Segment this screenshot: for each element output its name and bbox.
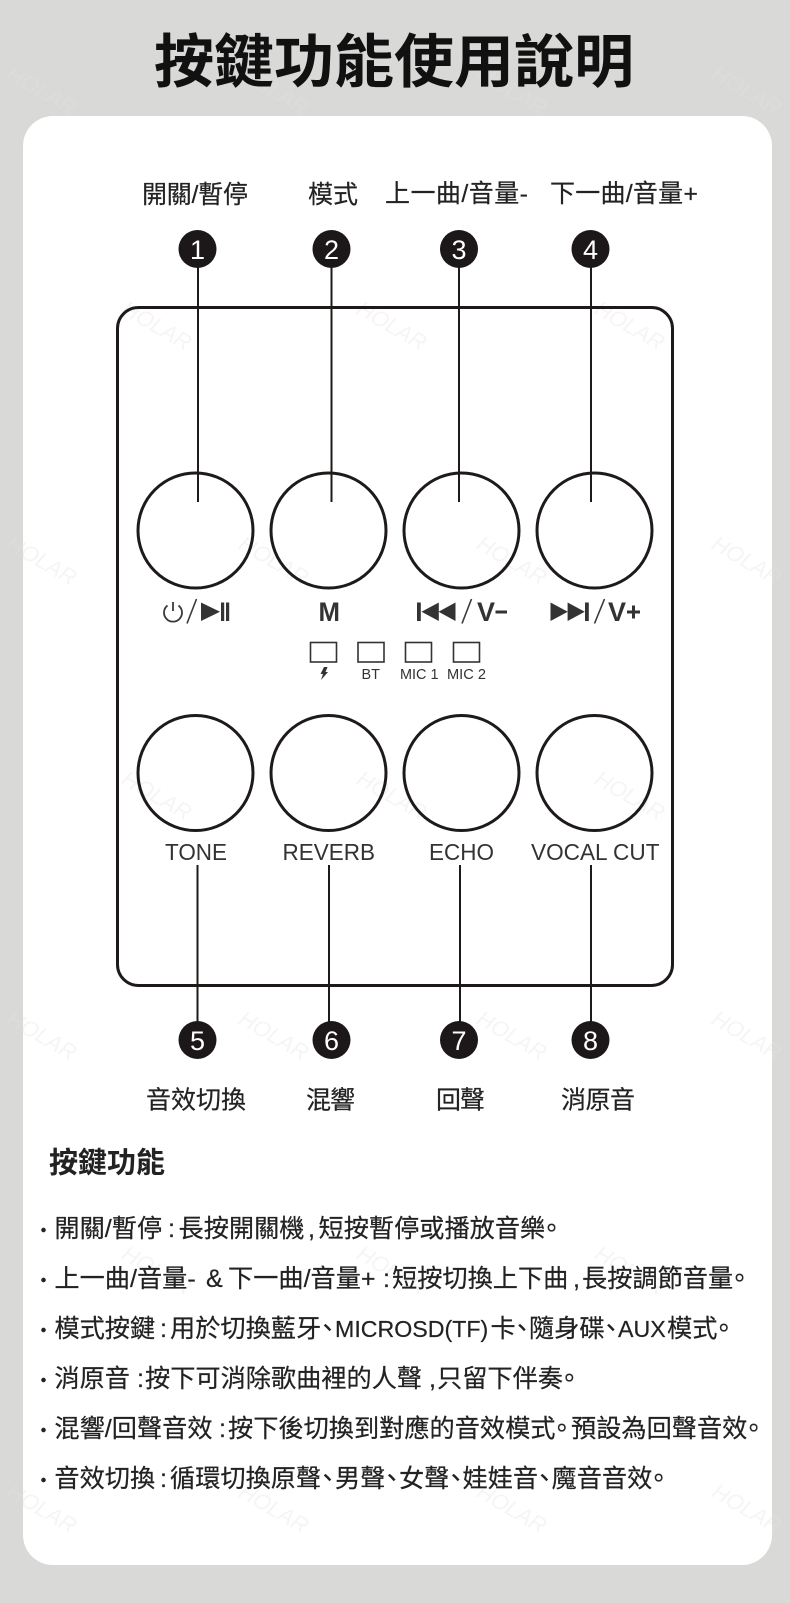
- bullet: reverb and echo: 預設為回聲音效。: [571, 1415, 760, 1443]
- top function labels: 開關/暫停: [142, 181, 248, 209]
- bullet: mode key: :: [160, 1315, 167, 1343]
- number badge 4: [572, 230, 610, 268]
- infographic: HOLAR: [473, 1479, 551, 1538]
- bullet: power and pause: :: [168, 1215, 175, 1243]
- bullet: vocal cut: 只留下伴奏。: [437, 1365, 576, 1393]
- knob labels: ECHO: [429, 839, 494, 865]
- bullet: mode key: 卡、: [490, 1315, 528, 1343]
- infographic: HOLAR: [118, 766, 196, 825]
- bullet: vocal cut: 消原音: [54, 1365, 130, 1393]
- infographic: HOLAR: [235, 61, 313, 120]
- infographic: HOLAR: [118, 296, 196, 355]
- bullet: vocal cut: [41, 1365, 576, 1393]
- bottom function labels: 音效切換: [146, 1086, 246, 1114]
- bullet: power and pause: 開關/暫停: [54, 1215, 162, 1243]
- bullet: previous and next: 下一曲/音量+: [228, 1265, 376, 1293]
- title: 按鍵功能使用說明: [154, 30, 634, 95]
- bullet: reverb and echo: 按下後切換到對應的音效模式。: [228, 1415, 568, 1443]
- infographic: HOLAR: [235, 1479, 313, 1538]
- bullet: previous and next: ,: [573, 1265, 580, 1293]
- bottom row knobs: [138, 716, 652, 830]
- bottom function labels: 消原音: [561, 1086, 635, 1114]
- bullet: previous and next: [41, 1265, 746, 1293]
- knob labels: VOCAL CUT: [531, 839, 660, 865]
- infographic: HOLAR: [235, 531, 313, 590]
- number badge 5: 5: [190, 1026, 205, 1056]
- top function labels: [142, 180, 698, 209]
- bullet: mode key: AUX: [618, 1316, 666, 1342]
- bullet: tone switch: :: [160, 1465, 167, 1493]
- infographic: HOLAR: [3, 531, 81, 590]
- bullet: tone switch: 男聲、: [335, 1465, 398, 1493]
- bullet: previous and next: 上一曲/音量-: [54, 1265, 196, 1293]
- icon: power and play/pause: [164, 599, 229, 624]
- icon: previous / volume down: V: [477, 597, 495, 627]
- bullet: tone switch: 音效切換: [54, 1465, 155, 1493]
- bottom leader lines: [198, 865, 591, 1026]
- infographic: HOLAR: [708, 1006, 786, 1065]
- bullet: reverb and echo: 混響/回聲音效: [54, 1415, 213, 1443]
- top function labels: 下一曲/音量+: [550, 180, 698, 208]
- infographic: HOLAR: [708, 1479, 786, 1538]
- infographic: HOLAR: [353, 1241, 431, 1300]
- label: M: M: [318, 597, 340, 627]
- bullet: previous and next: 長按調節音量。: [582, 1265, 746, 1293]
- bullet: tone switch: 女聲、: [399, 1465, 462, 1493]
- bottom function labels: 混響: [306, 1086, 355, 1114]
- bottom function labels: [146, 1086, 635, 1114]
- bullet: power and pause: ,: [308, 1215, 315, 1243]
- infographic: HOLAR: [3, 531, 81, 590]
- bullet: mode key: 用於切換藍牙、: [170, 1315, 334, 1343]
- indicator labels: MIC 1: [400, 666, 438, 683]
- bullet: tone switch: [41, 1465, 665, 1493]
- icon: next / volume up: [550, 597, 640, 627]
- infographic: HOLAR: [118, 1241, 196, 1300]
- bullet: reverb and echo: :: [219, 1415, 226, 1443]
- bullet: vocal cut: :: [137, 1365, 144, 1393]
- top function labels: 模式: [308, 181, 358, 209]
- knob labels: REVERB: [282, 839, 375, 865]
- bottom function labels: 回聲: [436, 1086, 485, 1114]
- bullet: previous and next: 短按切換上下曲: [392, 1265, 568, 1293]
- number badge 8: [572, 1021, 610, 1059]
- infographic: HOLAR: [591, 766, 669, 825]
- number badge 5: [178, 1021, 216, 1059]
- infographic: HOLAR: [473, 1006, 551, 1065]
- indicator labels: MIC 2: [447, 666, 486, 683]
- number badge 7: 7: [451, 1026, 467, 1056]
- infographic: HOLAR: [708, 61, 786, 120]
- bullet: mode key: 模式。: [667, 1315, 730, 1343]
- infographic: HOLAR: [3, 1006, 81, 1065]
- infographic: HOLAR: [591, 1241, 669, 1300]
- bullet: previous and next: :: [383, 1265, 390, 1293]
- control panel outline: [118, 308, 672, 986]
- infographic: HOLAR: [708, 531, 786, 590]
- bullet: vocal cut: 按下可消除歌曲裡的人聲: [145, 1365, 422, 1393]
- number badge 7: [440, 1021, 478, 1059]
- number badge 6: [312, 1021, 350, 1059]
- infographic: HOLAR: [591, 296, 669, 355]
- number badge 2: [312, 230, 350, 268]
- infographic: HOLAR: [473, 61, 551, 120]
- infographic: HOLAR: [3, 1479, 81, 1538]
- infographic: HOLAR: [353, 296, 431, 355]
- knob labels: TONE: [165, 839, 227, 865]
- bullet: mode key: 隨身碟、: [529, 1315, 617, 1343]
- infographic: HOLAR: [708, 1006, 786, 1065]
- infographic: HOLAR: [235, 1006, 313, 1065]
- number badge 3: [440, 230, 478, 268]
- knob labels: [165, 839, 660, 865]
- section heading: 按鍵功能: [49, 1146, 165, 1180]
- bullet: mode key: MICROSD(TF): [335, 1316, 488, 1342]
- bullet: previous and next: &: [206, 1265, 223, 1293]
- number badge 3: 3: [451, 235, 467, 265]
- top row buttons: [138, 473, 652, 588]
- icon: previous / volume down: [417, 597, 507, 627]
- infographic: HOLAR: [708, 531, 786, 590]
- infographic: HOLAR: [3, 1006, 81, 1065]
- bullet: power and pause: 長按開關機: [178, 1215, 304, 1243]
- bullet: power and pause: 短按暫停或播放音樂。: [318, 1215, 558, 1243]
- top function labels: 上一曲/音量-: [385, 180, 528, 208]
- number badge 6: 6: [324, 1026, 339, 1056]
- indicator labels: [362, 666, 486, 683]
- number badge 2: 2: [324, 235, 339, 265]
- indicator lights: [310, 642, 480, 662]
- function list: [41, 1215, 760, 1493]
- infographic: HOLAR: [353, 766, 431, 825]
- bullet: tone switch: 循環切換原聲、: [170, 1465, 334, 1493]
- number badge 1: [178, 230, 216, 268]
- bullet: mode key: 模式按鍵: [54, 1315, 155, 1343]
- bullet: mode key: [41, 1315, 730, 1343]
- icon: next / volume up: V: [608, 597, 626, 627]
- bullet: tone switch: 娃娃音、: [462, 1465, 551, 1493]
- infographic: HOLAR: [3, 1479, 81, 1538]
- top leader lines: [198, 262, 591, 502]
- indicator labels: BT: [362, 666, 380, 683]
- bullet: reverb and echo: [41, 1415, 760, 1443]
- infographic: HOLAR: [3, 61, 81, 120]
- bullet: tone switch: 魔音音效。: [552, 1465, 665, 1493]
- number badge 8: 8: [583, 1026, 598, 1056]
- bullet: vocal cut: ,: [429, 1365, 436, 1393]
- number badge 4: 4: [583, 235, 598, 265]
- icon: charging bolt: [320, 667, 328, 680]
- infographic: HOLAR: [473, 531, 551, 590]
- bullet: power and pause: [41, 1215, 558, 1243]
- number badge 1: 1: [190, 235, 205, 265]
- infographic: HOLAR: [708, 1479, 786, 1538]
